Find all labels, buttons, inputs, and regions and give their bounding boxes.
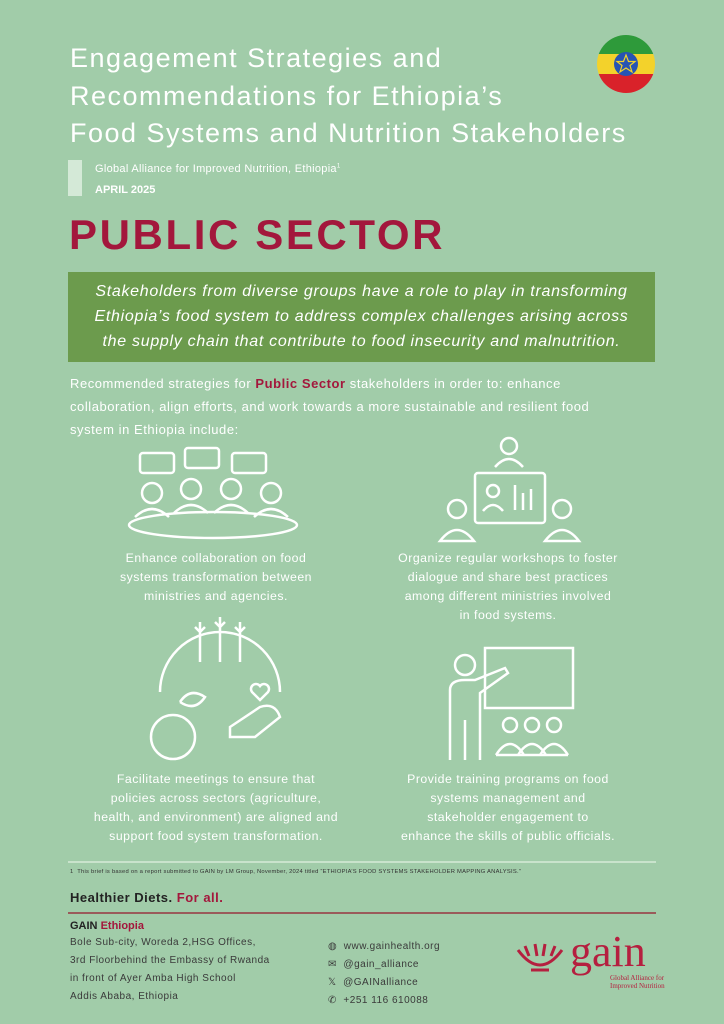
address block: GAIN Ethiopia [70, 920, 144, 932]
caption 4: systems management and [430, 791, 586, 805]
intro paragraph: Recommended strategies for Public Sector stakeholders in order to: enhance [70, 376, 561, 391]
caption 3: policies across sectors (agriculture, [111, 791, 321, 805]
caption 2: among different ministries involved [405, 589, 611, 603]
callout box: the supply chain that contribute to food insecurity and malnutrition. [103, 333, 620, 350]
heading: public sector: PUBLIC SECTOR [69, 211, 445, 258]
contacts [328, 941, 440, 1006]
callout box: Ethiopia’s food system to address complex challenges arising across [95, 308, 628, 325]
address block [70, 920, 270, 1002]
caption 2: Organize regular workshops to foster [398, 551, 618, 565]
icon: meeting table [128, 446, 298, 540]
subtitle block [68, 160, 340, 196]
intro paragraph: system in Ethiopia include: [70, 422, 239, 437]
icon: sectors [150, 617, 282, 760]
caption 3 [94, 772, 338, 843]
address block: 3rd Floorbehind the Embassy of Rwanda [70, 955, 270, 966]
icon: workshop [438, 436, 582, 542]
caption 3: support food system transformation. [109, 829, 323, 843]
logo: gain: gain [570, 927, 646, 976]
intro paragraph: collaboration, align efforts, and work towards a more sustainable and resilient food [70, 399, 589, 414]
intro paragraph [70, 376, 589, 437]
contacts: ✆ +251 116 610088 [328, 995, 428, 1006]
callout box [68, 272, 655, 362]
caption 2: in food systems. [460, 608, 556, 622]
title: Engagement Strategies and [70, 43, 442, 73]
caption 1 [120, 551, 312, 603]
title: Recommendations for Ethiopia’s [70, 80, 503, 110]
caption 3: health, and environment) are aligned and [94, 810, 338, 824]
contacts: ◍ www.gainhealth.org [328, 941, 440, 952]
title [70, 43, 627, 148]
address block: Addis Ababa, Ethiopia [70, 991, 178, 1002]
icon: training [448, 646, 574, 760]
caption 2 [398, 551, 618, 622]
caption 4: stakeholder engagement to [427, 810, 589, 824]
caption 4: Provide training programs on food [407, 772, 609, 786]
footnote: 1 This brief is based on a report submitted to GAIN by LM Group, November, 2024 titled “ETHIOPIA’S FOOD SYSTEMS STAKEHOLDER MAPPING ANALYSIS.” [70, 869, 521, 875]
address block: Bole Sub-city, Woreda 2,HSG Offices, [70, 937, 256, 948]
subtitle block: Global Alliance for Improved Nutrition, Ethiopia1 [95, 163, 340, 175]
logo: gain: Global Alliance for [610, 974, 664, 982]
title: Food Systems and Nutrition Stakeholders [70, 118, 627, 148]
caption 1: systems transformation between [120, 570, 312, 584]
contacts: ✉ @gain_alliance [328, 959, 419, 970]
caption 1: ministries and agencies. [144, 589, 288, 603]
caption 4: enhance the skills of public officials. [401, 829, 615, 843]
logo: gain [516, 927, 665, 990]
address block: in front of Ayer Amba High School [70, 973, 236, 984]
caption 1: Enhance collaboration on food [126, 551, 306, 565]
icon: ethiopia flag [597, 35, 655, 93]
subtitle block: APRIL 2025 [95, 184, 155, 196]
caption 2: dialogue and share best practices [408, 570, 608, 584]
caption 3: Facilitate meetings to ensure that [117, 772, 315, 786]
contacts: 𝕏 @GAINalliance [328, 977, 418, 988]
tagline: Healthier Diets. For all. [70, 890, 223, 905]
logo: gain: Improved Nutrition [610, 982, 665, 990]
caption 4 [401, 772, 615, 843]
callout box: Stakeholders from diverse groups have a role to play in transforming [95, 283, 628, 300]
